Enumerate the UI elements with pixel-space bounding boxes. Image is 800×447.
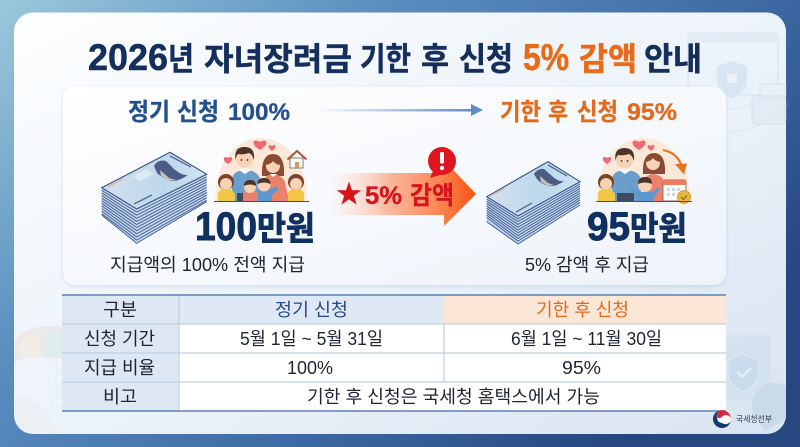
amount: 95: 95	[587, 205, 630, 249]
title: 자녀장려금	[204, 41, 352, 77]
table header	[103, 300, 629, 320]
label: 5% reduction: 5%	[365, 182, 402, 210]
label: 5% reduction	[365, 182, 454, 210]
house	[290, 158, 303, 168]
table row: note: 기한 후 신청은 국세청 홈택스에서 가능	[307, 387, 600, 407]
icon: money stack 100	[102, 152, 207, 243]
title: 신청	[459, 41, 513, 77]
icon: family 95	[596, 138, 692, 204]
decorative bottom-right icons	[726, 335, 786, 431]
girl	[598, 189, 615, 202]
title: 2026	[88, 37, 168, 78]
hearts	[632, 140, 646, 150]
table header: 정기 신청	[275, 300, 348, 320]
heading: regular application: 신청	[177, 99, 219, 126]
mom	[643, 153, 665, 174]
icon: alert bubble	[428, 147, 456, 178]
logo: national tax service	[713, 410, 772, 428]
mom	[262, 154, 284, 176]
check badge	[678, 190, 690, 204]
table row: note	[103, 387, 600, 407]
table row: ratio: 95%	[562, 358, 601, 378]
icon: star	[337, 182, 361, 205]
dad	[612, 170, 641, 201]
table row: period: 6월 1일 ~ 11월 30일	[511, 329, 662, 349]
title: 5%	[523, 37, 569, 78]
arrow: regular to late	[313, 104, 483, 116]
arrow: 5% reduction	[332, 160, 476, 226]
curved arrow	[663, 150, 682, 167]
decorative top-right icons	[688, 33, 788, 133]
panel: comparison	[63, 87, 726, 285]
amount: 100	[195, 205, 315, 249]
heading: late application: 신청	[577, 99, 618, 126]
amount: 100: 만원	[257, 210, 315, 247]
amount: 100: 100	[195, 205, 257, 249]
heading: late application: 기한	[500, 99, 541, 126]
table row: ratio	[84, 358, 601, 378]
table row: period: 5월 1일 ~ 5월 31일	[240, 329, 383, 349]
child two	[258, 186, 278, 201]
right girl	[288, 189, 304, 202]
table row: period: 신청 기간	[84, 329, 155, 349]
logo: national tax service: 국세청선부	[736, 414, 772, 424]
dad	[232, 170, 260, 201]
heading: late application: 후	[548, 99, 568, 126]
icon: money stack 95	[487, 162, 580, 244]
hearts	[253, 140, 267, 150]
title: 안내	[644, 41, 702, 77]
heading: regular application	[128, 99, 290, 126]
label: 5% reduction: 감액	[410, 182, 454, 210]
table header: 구분	[103, 300, 137, 320]
heading: late application: 95%	[627, 99, 677, 126]
icon: family 100	[214, 138, 309, 202]
table row: ratio: 100%	[287, 358, 333, 378]
table row: period	[84, 329, 662, 349]
heading: regular application: 정기	[128, 99, 170, 126]
table row: ratio: 지급 비율	[84, 358, 155, 378]
title: 기한	[360, 41, 411, 77]
caption: full payment: 지급액의 100% 전액 지급	[110, 255, 305, 275]
title: 후	[421, 41, 449, 77]
title: 감액	[579, 41, 637, 77]
child with raised arms	[629, 188, 660, 201]
left girl	[218, 189, 235, 202]
table header: 기한 후 신청	[536, 300, 629, 320]
decorative left motif	[14, 326, 70, 434]
title: 년	[168, 41, 194, 77]
caption: reduced payment: 5% 감액 후 지급	[525, 255, 649, 275]
calendar	[663, 180, 686, 201]
heading: late application	[500, 99, 677, 126]
heading: regular application: 100%	[228, 99, 290, 126]
title	[88, 37, 702, 78]
child one	[243, 190, 258, 201]
amount: 95: 만원	[630, 210, 687, 247]
table row: note: 비고	[103, 387, 137, 407]
table: schedule comparison	[62, 295, 726, 411]
amount: 95	[587, 205, 687, 249]
